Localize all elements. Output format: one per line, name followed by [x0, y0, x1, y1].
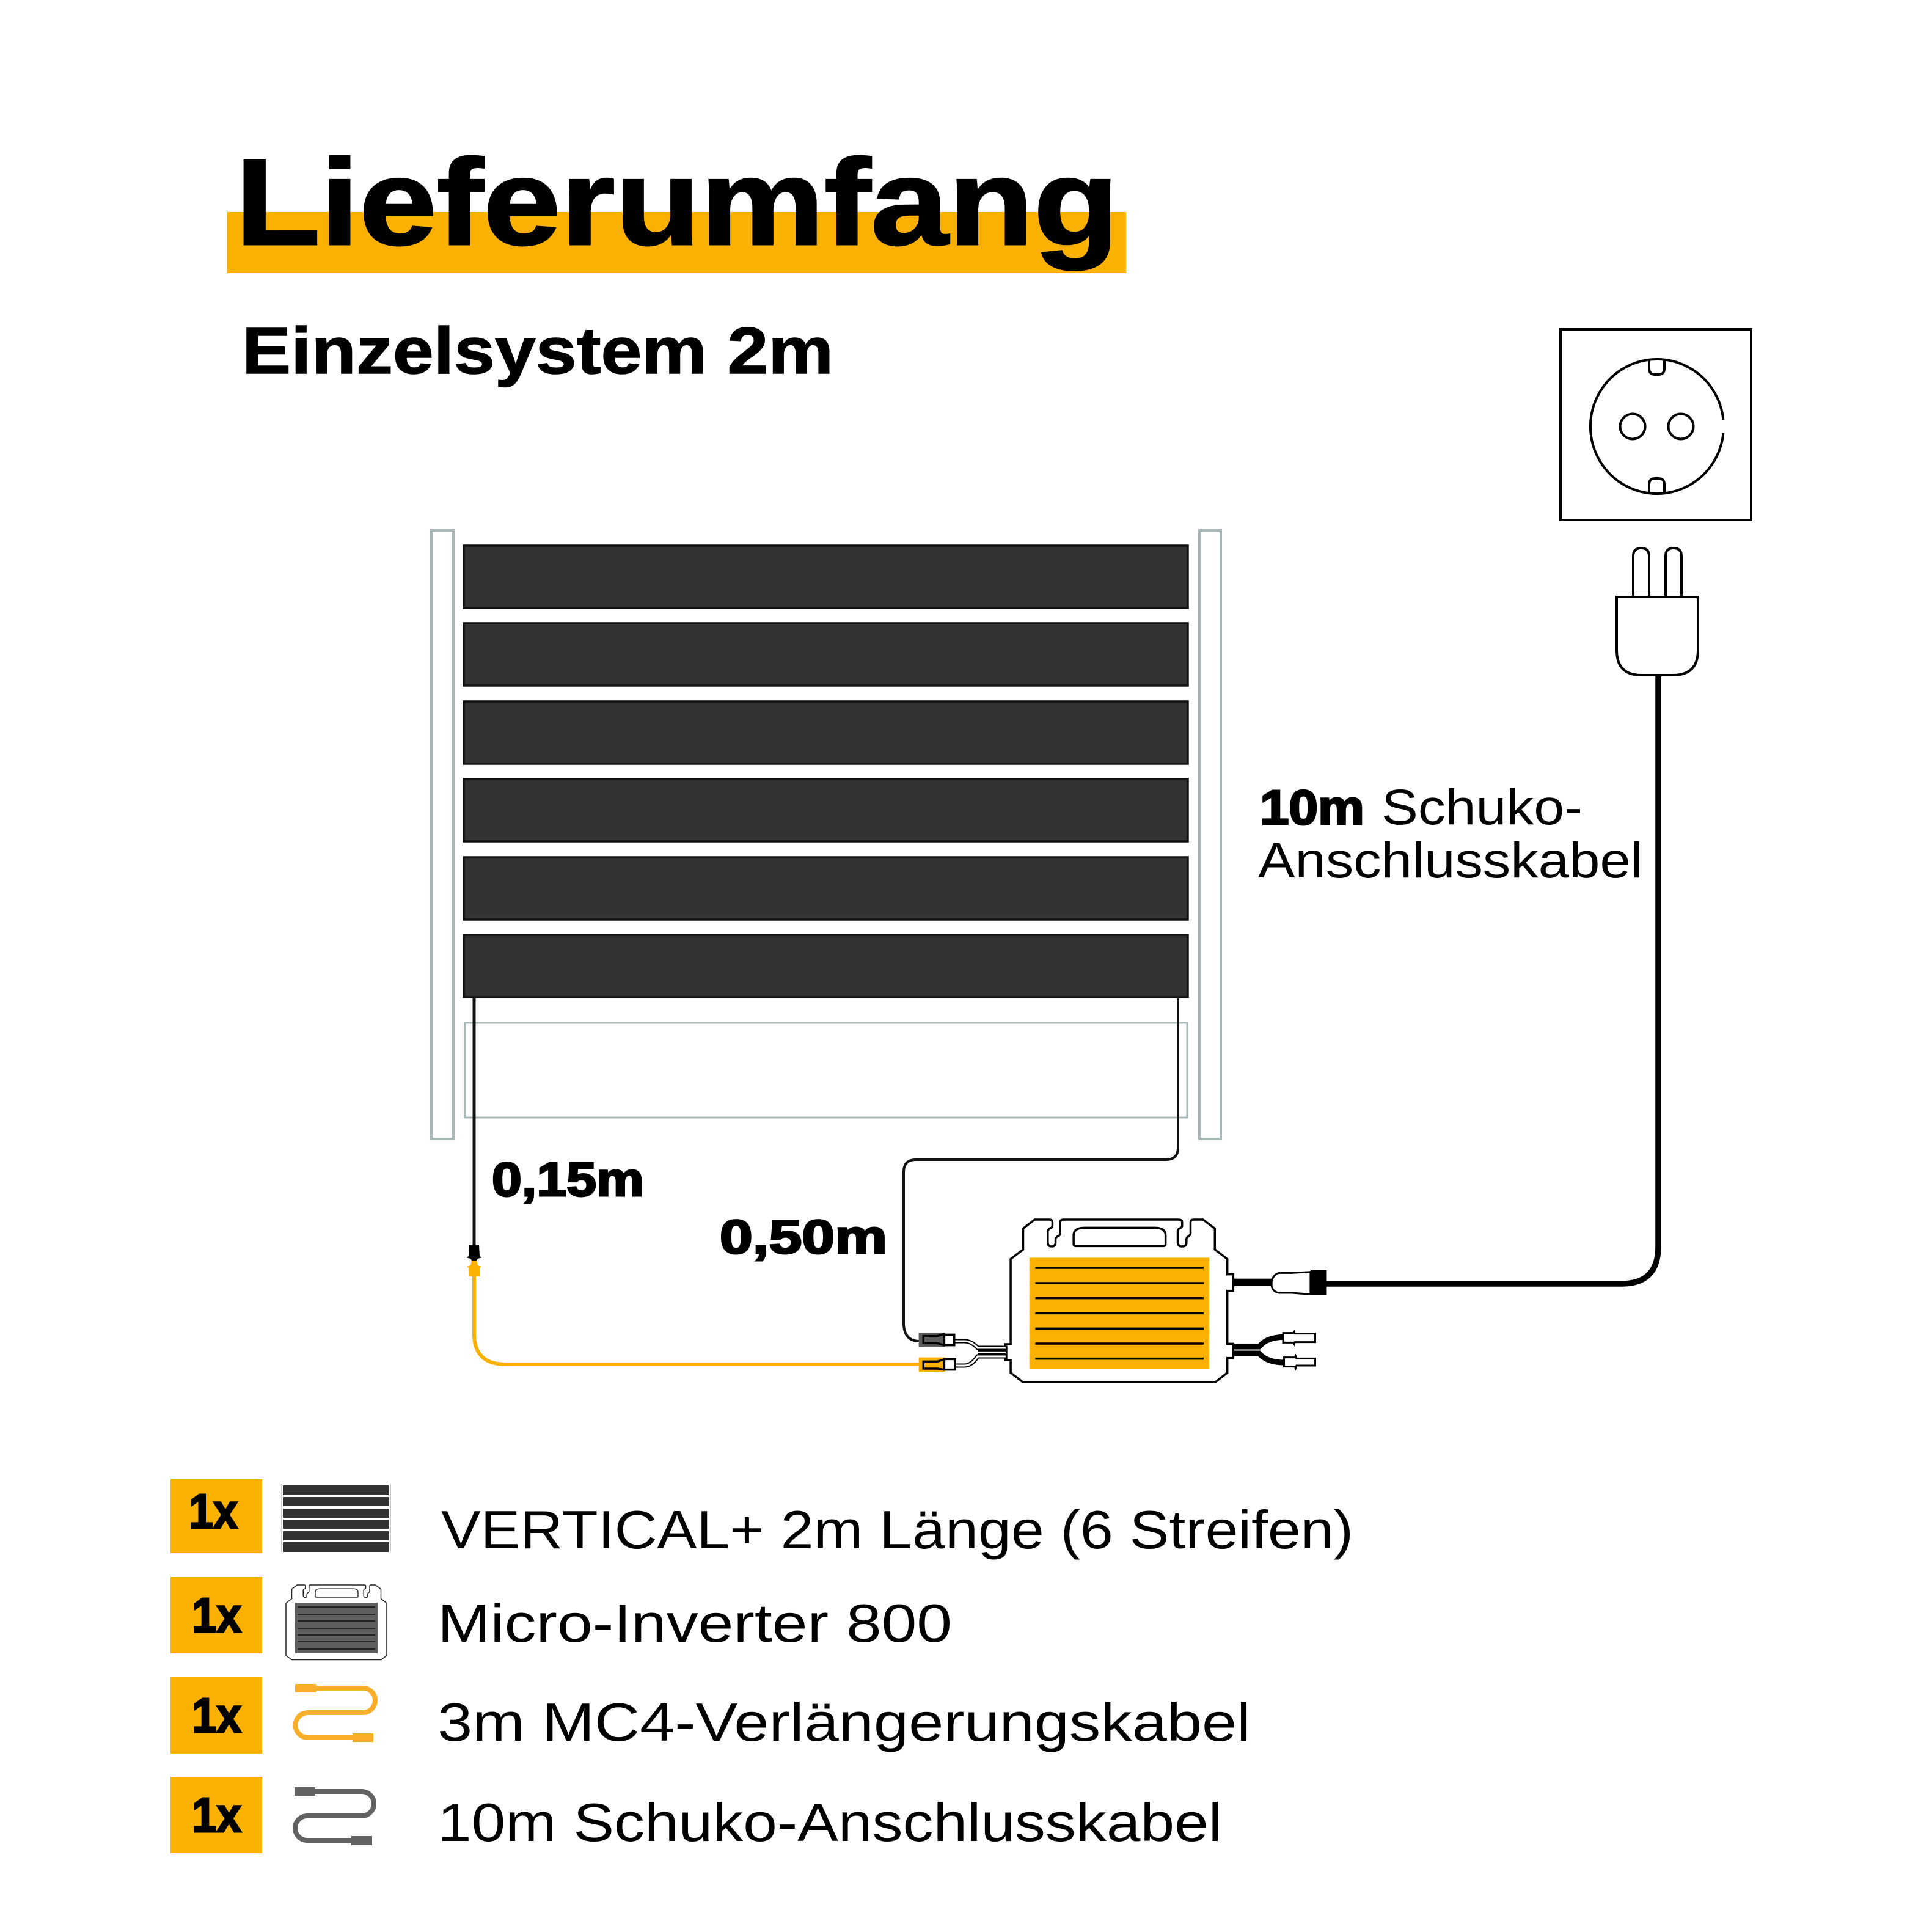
strip 4 — [464, 779, 1188, 841]
icon: micro inverter with cables — [919, 1220, 1326, 1382]
icon: strips — [281, 1484, 391, 1552]
item text: 3m MC4-Verlängerungskabel — [437, 1692, 1251, 1752]
inverter display — [1030, 1257, 1209, 1369]
inverter right output cables — [1233, 1337, 1284, 1363]
item text: 10m Schuko-Anschlusskabel — [437, 1792, 1222, 1853]
legend row 2 — [170, 1577, 952, 1659]
strip 6 — [464, 935, 1188, 997]
quantity badge — [170, 1479, 262, 1553]
panel: solar strips with rails — [431, 530, 1221, 1139]
MC4 plug lower — [1284, 1356, 1315, 1368]
right rail — [1199, 530, 1221, 1139]
label: 0,50m: 0,50m — [720, 1210, 887, 1264]
strip 5 — [464, 857, 1188, 920]
label: 10m Schuko-Anschlusskabel: Anschlusskabel — [1258, 833, 1643, 888]
legend row 4 — [170, 1777, 1222, 1853]
strip 2 — [464, 623, 1188, 686]
icon: gray cable — [295, 1787, 374, 1845]
display lines — [1035, 1268, 1204, 1359]
quantity: 1x — [192, 1788, 241, 1842]
icon: micro inverter — [286, 1585, 387, 1659]
inverter body — [1005, 1220, 1233, 1382]
quantity: 1x — [189, 1484, 238, 1539]
quantity badge — [170, 1577, 262, 1653]
yellow connector — [919, 1358, 945, 1372]
icon: Schuko plug — [1617, 548, 1698, 675]
strip 1 — [464, 546, 1188, 608]
quantity: 1x — [192, 1688, 241, 1743]
left rail — [431, 530, 453, 1139]
strip 3 — [464, 701, 1188, 764]
inverter handle — [1074, 1228, 1166, 1246]
label: 0,15m: 0,15m — [492, 1152, 644, 1206]
cable: yellow MC4 extension — [467, 1261, 919, 1364]
lower frame — [465, 1023, 1187, 1118]
item text: Micro-Inverter 800 — [437, 1593, 952, 1653]
item text: VERTICAL+ 2m Länge (6 Streifen) — [441, 1499, 1353, 1560]
cable: short 0,15m black lead — [466, 997, 482, 1261]
title: Lieferumfang — [235, 134, 1119, 271]
quantity badge — [170, 1677, 262, 1754]
Y cable — [954, 1341, 1006, 1366]
Schuko connector — [1272, 1272, 1311, 1294]
subtitle: Einzelsystem 2m — [242, 313, 833, 387]
cable: main Schuko cable — [1308, 674, 1658, 1284]
cable: 0,50m black lead — [904, 997, 1178, 1341]
label: 10m Schuko-Anschlusskabel: Schuko- — [1381, 780, 1583, 835]
icon: yellow cable — [295, 1684, 375, 1742]
legend row 3 — [170, 1677, 1251, 1754]
legend row 1 — [170, 1479, 1353, 1560]
gray connector — [919, 1333, 945, 1347]
MC4 plug upper — [1283, 1331, 1315, 1344]
icon: wall socket — [1561, 329, 1751, 520]
quantity badge — [170, 1777, 262, 1853]
title band — [227, 212, 1126, 273]
quantity: 1x — [192, 1588, 241, 1642]
label: 10m Schuko-Anschlusskabel: 10m — [1260, 780, 1364, 835]
label: 10m Schuko-Anschlusskabel — [1258, 780, 1643, 888]
